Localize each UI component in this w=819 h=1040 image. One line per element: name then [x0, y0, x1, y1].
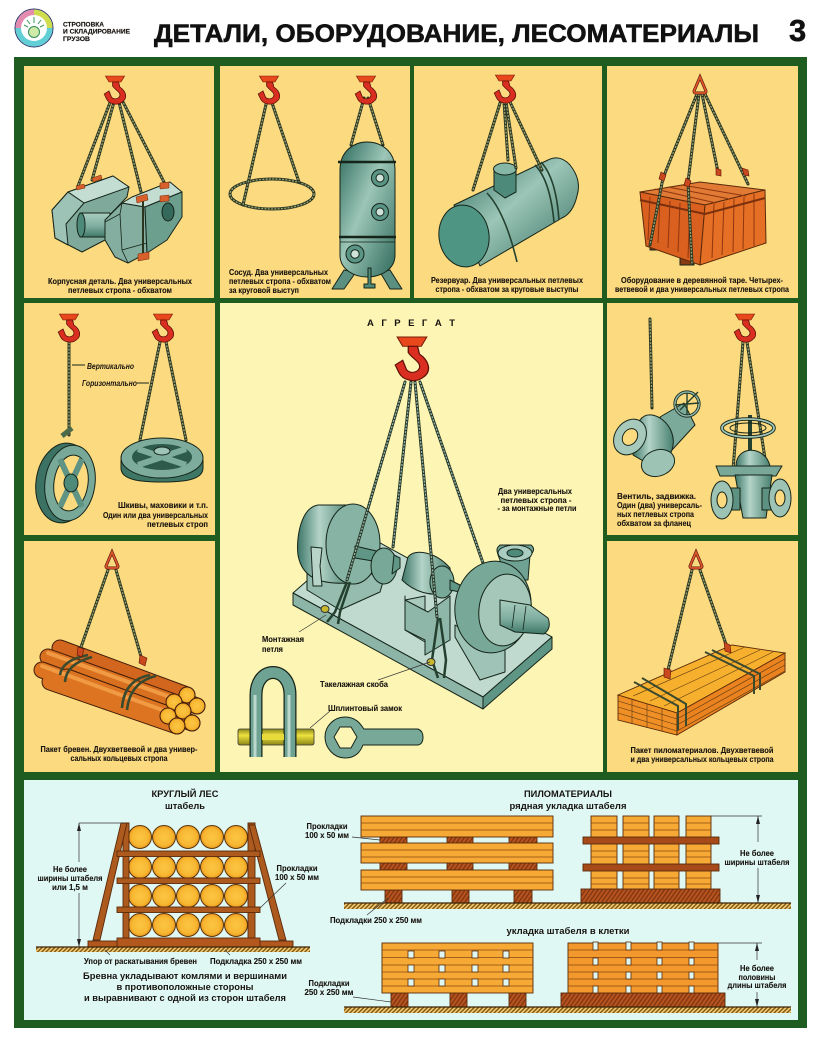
vertical pulley: [31, 439, 100, 527]
header logo: [15, 9, 53, 47]
round timber note: в противоположные стороны: [116, 982, 254, 992]
direction labels: [72, 361, 149, 388]
ring sling: [230, 100, 314, 209]
row stack dimension: ширины штабеля: [724, 857, 790, 867]
panel: log bundle: [24, 541, 215, 772]
hook: [104, 76, 126, 104]
hook: [395, 337, 429, 381]
triangle link: [694, 77, 706, 93]
cross stack, side: [382, 943, 533, 1007]
caption: Шкивы, маховики и т.п.: [118, 500, 208, 510]
pulley rope: [62, 342, 72, 436]
row stack dimension: Не более: [740, 848, 774, 858]
labels: петля: [262, 644, 283, 654]
row stack labels: [305, 821, 422, 925]
height dimension: [38, 823, 125, 947]
left valve rope: [650, 319, 652, 408]
caption: Оборудование в деревянной таре. Четырех-: [621, 275, 783, 285]
direction labels: Вертикально: [87, 361, 134, 371]
caption: [229, 267, 331, 295]
sheet number: 3: [789, 13, 806, 48]
vessel slings and hook: [351, 76, 383, 145]
pump: [449, 545, 549, 680]
caption: Резервуар. Два универсальных петлевых: [431, 275, 583, 285]
row stack dimension: [711, 816, 790, 903]
caption: [103, 500, 208, 529]
flywheel: [121, 438, 203, 482]
labels: Шплинтовый замок: [328, 703, 403, 713]
caption: за круговой выступ: [229, 285, 299, 295]
cross stack, front: [561, 942, 725, 1007]
direction labels: Горизонтально: [82, 378, 137, 388]
horizontal sling and hook: [140, 314, 186, 440]
title: ДЕТАЛИ, ОБОРУДОВАНИЕ, ЛЕСОМАТЕРИАЛЫ: [154, 20, 759, 48]
caption: Один (два) универсаль-: [617, 500, 702, 510]
round timber note: Бревна укладывают комлями и вершинами: [83, 971, 287, 981]
cross stack dimension: Не более: [740, 963, 774, 973]
caption: Пакет бревен. Двухветвевой и два универ-: [40, 744, 198, 754]
hook: [734, 314, 756, 342]
row stack, front: [581, 816, 720, 903]
caption: обхватом за фланец: [617, 518, 692, 528]
sawn timber heading: [506, 789, 630, 936]
caption: [630, 745, 774, 764]
row stack labels: Прокладки: [306, 821, 348, 831]
panel: pulleys: [24, 303, 215, 535]
caption: [617, 491, 702, 528]
cross stack labels: [304, 978, 391, 1002]
cross stack labels: Подкладки: [308, 978, 350, 988]
round timber note: [83, 971, 287, 1003]
labels: петлевых стропа -: [500, 495, 572, 505]
triangle link: [690, 552, 702, 568]
cross stack dimension: длины штабеля: [728, 980, 787, 990]
labels: Такелажная скоба: [320, 679, 388, 689]
tank: [435, 158, 578, 270]
base plate: [293, 533, 552, 709]
panel: storage stacks: [24, 780, 798, 1020]
panel: wooden crate: [607, 66, 798, 298]
round timber labels: [84, 863, 319, 966]
sawn timber heading: ПИЛОМАТЕРИАЛЫ: [524, 789, 612, 799]
round timber heading: [152, 788, 219, 811]
round timber labels: Прокладки: [276, 863, 318, 873]
caption: [615, 275, 789, 294]
round timber heading: штабель: [165, 801, 205, 811]
hook: [58, 314, 80, 342]
slings: [650, 94, 749, 264]
slings: [347, 382, 483, 617]
ground line: [344, 903, 791, 909]
slings: [78, 100, 165, 200]
round timber labels: Упор от раскатывания бревен: [84, 956, 197, 966]
labels: Два универсальных: [498, 486, 572, 496]
row stack labels: Подкладки 250 х 250 мм: [330, 915, 422, 925]
coupling, housing and shaft: [371, 548, 460, 655]
panel: lumber package: [607, 541, 798, 772]
cross stack labels: 250 х 250 мм: [304, 987, 354, 997]
cross stack dimension: половины: [738, 972, 776, 982]
caption: и два универсальных кольцевых стропа: [630, 754, 774, 764]
lumber: [618, 645, 785, 735]
height dimension: ширины штабеля: [38, 873, 103, 883]
slings: [473, 100, 542, 190]
labels: - за монтажные петли: [498, 503, 576, 513]
caption: петлевых строп: [147, 519, 208, 529]
header subject text: [63, 22, 130, 43]
sawn timber heading: рядная укладка штабеля: [510, 801, 626, 811]
round timber labels: 100 х 50 мм: [275, 872, 319, 882]
header subject text: И СКЛАДИРОВАНИЕ: [63, 28, 130, 36]
header subject text: ГРУЗОВ: [63, 36, 90, 43]
caption: Один или два универсальных: [103, 510, 208, 520]
hook: [494, 75, 516, 103]
vessel: [332, 142, 402, 289]
right valve: [711, 415, 791, 519]
caption: Вентиль, задвижка.: [617, 491, 696, 501]
left valve: [607, 392, 699, 481]
panel: housing part: [24, 66, 214, 298]
caption: стропа - обхватом за круговые выступы: [436, 284, 578, 294]
mounting shackles and loops: [299, 582, 446, 680]
right valve slings: [733, 342, 766, 470]
caption: петлевых стропа - обхватом: [229, 276, 331, 286]
row stack, side: [361, 816, 553, 903]
panel heading: А Г Р Е Г А Т: [367, 318, 455, 329]
motor: [298, 504, 385, 610]
labels: Монтажная: [262, 634, 304, 644]
row stack labels: 100 х 50 мм: [305, 830, 349, 840]
slings and ties: [60, 570, 156, 710]
ties and slings: [634, 570, 760, 730]
cross stack dimension: [718, 943, 787, 1007]
panel: aggregate: [220, 303, 603, 772]
round timber labels: Подкладка 250 х 250 мм: [210, 956, 302, 966]
caption: Корпусная деталь. Два универсальных: [48, 276, 192, 286]
header subject text: СТРОПОВКА: [63, 22, 104, 28]
round timber note: и выравнивают с одной из сторон штабеля: [84, 993, 286, 1003]
caption: Сосуд. Два универсальных: [229, 267, 328, 277]
wrench: [325, 717, 423, 758]
height dimension: Не более: [53, 864, 87, 874]
panel: vessel: [220, 66, 410, 298]
panel: valves: [607, 303, 798, 535]
triangle link: [106, 552, 118, 568]
log stack: [88, 823, 293, 947]
caption: [40, 744, 198, 763]
caption: ных петлевых стропа: [617, 509, 694, 519]
ground line: [36, 947, 310, 952]
caption: петлевых стропа - обхватом: [68, 285, 172, 295]
sawn timber heading: укладка штабеля в клетки: [506, 926, 630, 936]
hook: [258, 76, 280, 104]
shackle: [238, 672, 330, 757]
round timber heading: КРУГЛЫЙ ЛЕС: [152, 788, 219, 799]
labels: [262, 486, 576, 713]
crate: [640, 182, 766, 265]
caption: сальных кольцевых стропа: [70, 753, 168, 763]
logs: [42, 648, 205, 734]
panel: tank: [414, 66, 602, 298]
caption: [431, 275, 583, 294]
height dimension: или 1,5 м: [52, 882, 88, 892]
caption: Пакет пиломатериалов. Двухветвевой: [630, 745, 774, 755]
caption: ветвевой и два универсальных петлевых стропа: [615, 284, 789, 294]
caption: [48, 276, 192, 295]
housing casting: [52, 175, 182, 263]
ground line: [344, 1007, 791, 1013]
